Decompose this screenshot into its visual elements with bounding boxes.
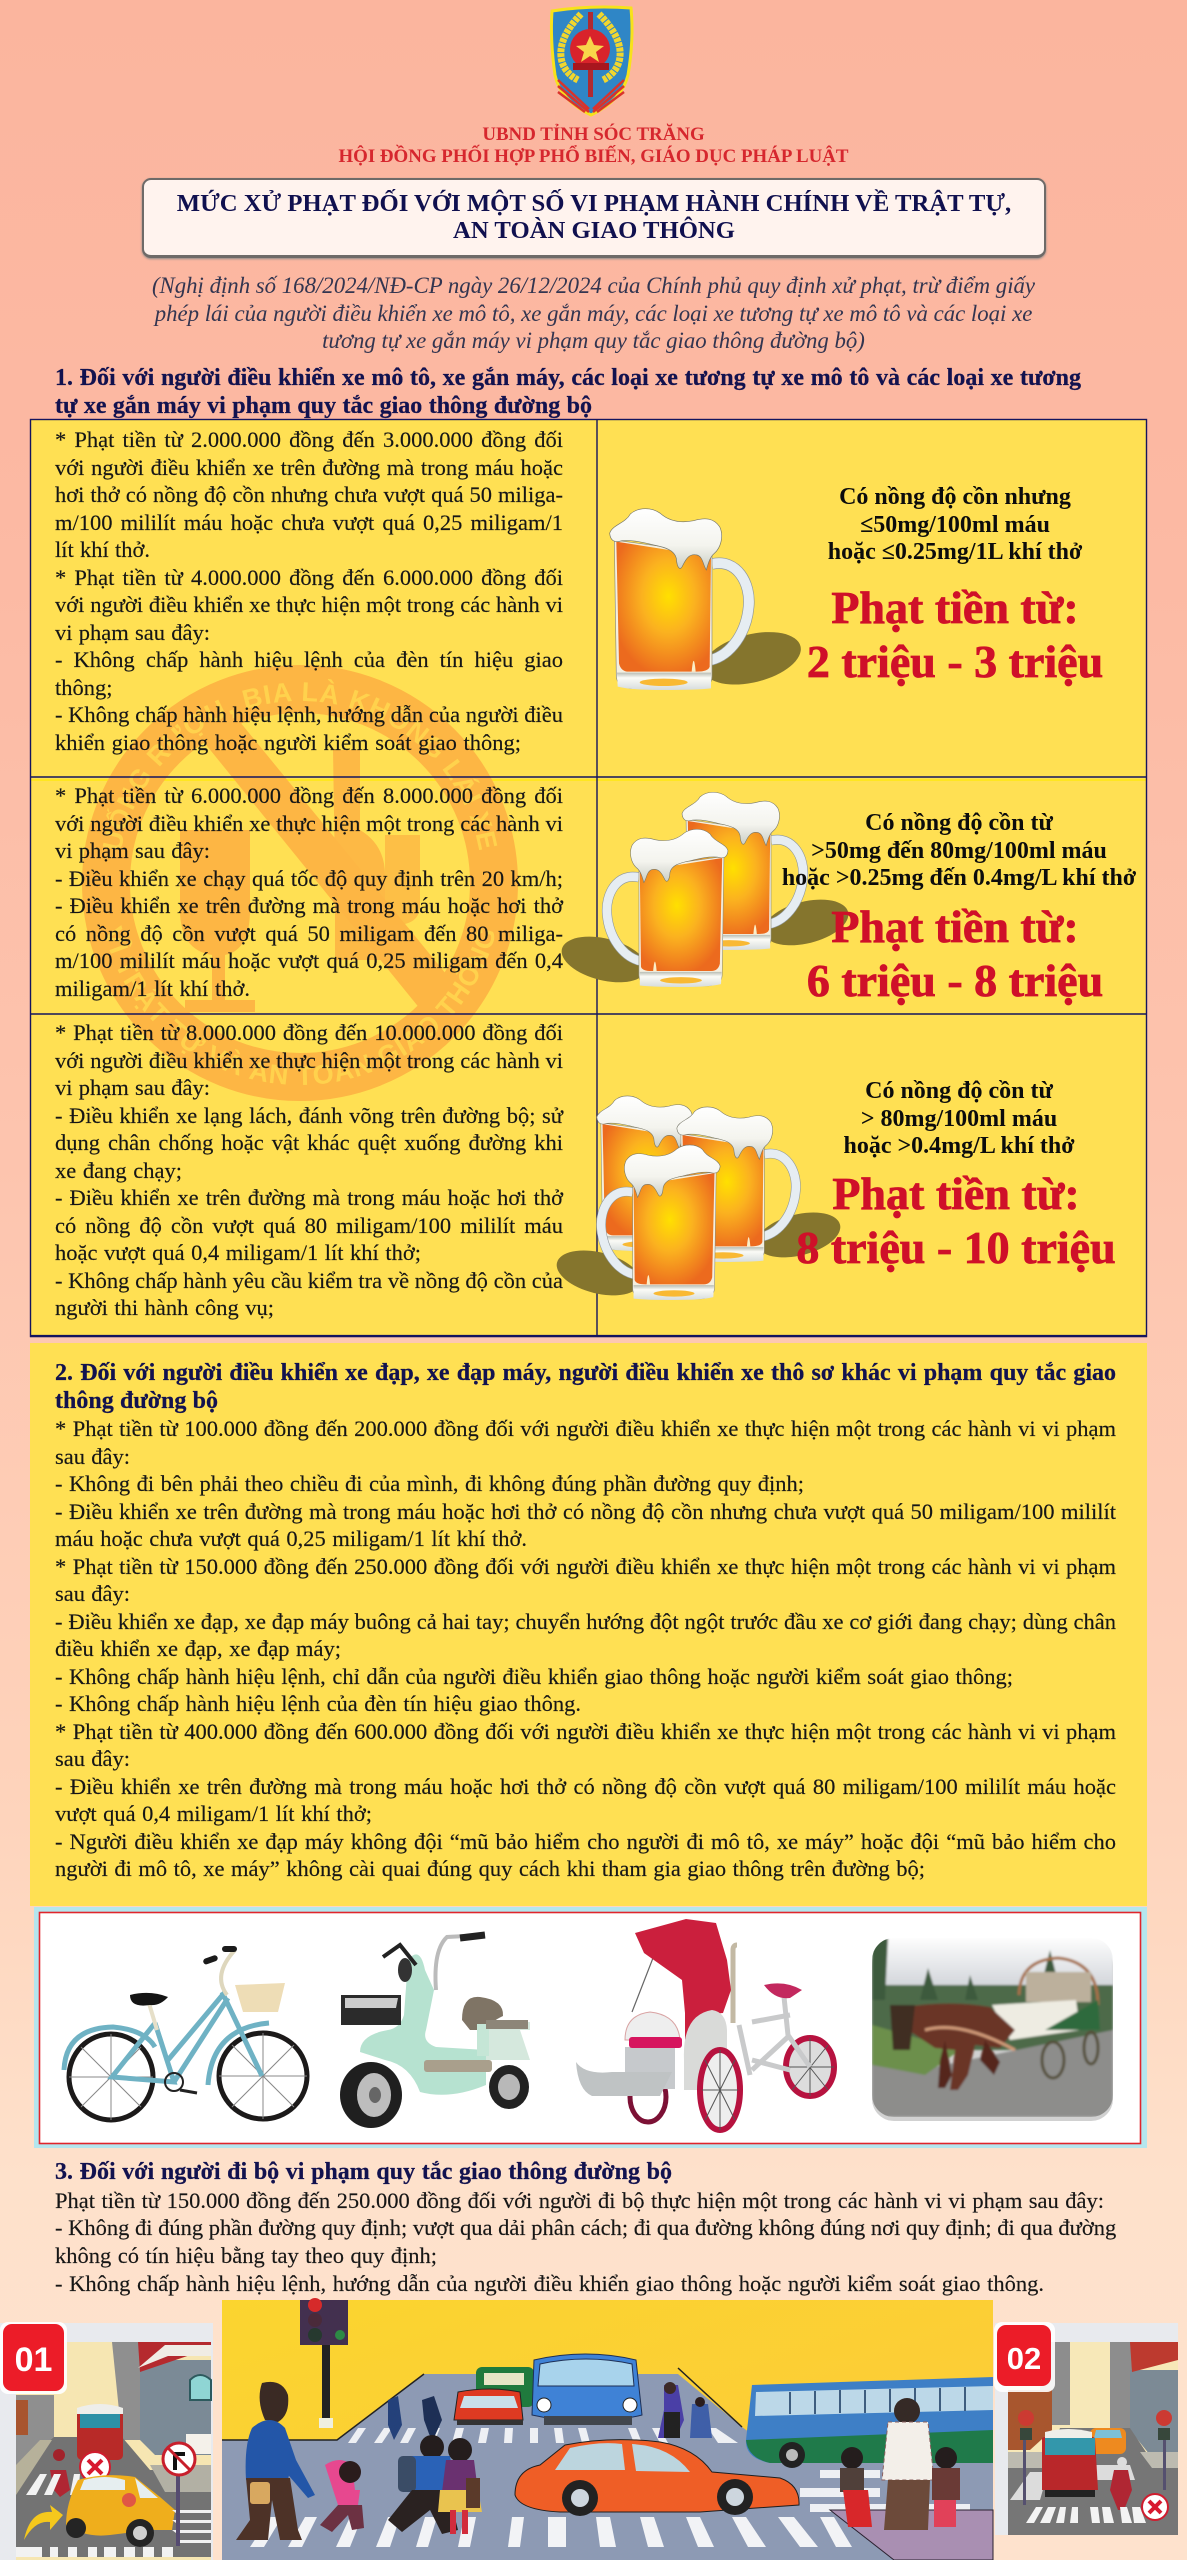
icon: bicycle [64,1946,307,2120]
woman and child [236,2382,364,2540]
badge 02: 02 [1007,2341,1041,2376]
badge 01 [3,2324,64,2391]
text: row 2 penalties: * Phạt tiền từ 6.000.000 đồng đến 8.000.000 đồng đối [55,783,563,808]
text: section 2 bicycles: sau đây: [55,1746,130,1771]
watermark: no drinking and driving emblem: UỐNG RƯỢU, BIA LÀ KHÔNG LÁI XE [102,679,498,850]
text: row 2 alcohol level [782,810,1136,891]
text: row 3 fine [796,1168,1116,1273]
text: row 3 alcohol level [843,1078,1074,1159]
text: row 2 penalties: với người điều khiển xe thực hiện một trong các hành vi [55,810,563,836]
text: row 2 penalties: vi phạm sau đây: [55,838,210,863]
text: row 3 penalties: * Phạt tiền từ 8.000.000 đồng đến 10.000.000 đồng đối [55,1020,563,1045]
text: row 2 fine [807,901,1103,1006]
text: row 3 fine: Phạt tiền từ: [832,1168,1080,1219]
icon: two beer mugs, row 2 [557,792,853,990]
heading: section 2 [55,1360,1116,1414]
motorcyclists [388,2396,442,2442]
man and two children [840,2398,960,2530]
heading: section 2: 2. Đối với người điều khiển xe đạp, xe đạp máy, người điều khiển xe thô sơ khác vi phạm quy tắc giao [55,1360,1116,1386]
title box: MỨC XỬ PHẠT ĐỐI VỚI MỘT SỐ VI PHẠM HÀNH CHÍNH VỀ TRẬT TỰ, [177,190,1011,217]
subtitle decree reference: tương tự xe gắn máy vi phạm quy tắc giao thông đường bộ) [322,328,865,353]
text: section 3 pedestrians [55,2159,1116,2296]
text: row 2 penalties: có nồng độ cồn vượt quá 50 miligam đến 80 miliga- [55,920,563,946]
organisation heading [338,124,849,167]
photo: horse carriage [872,1938,1113,2121]
text: row 3 penalties: xe đang chạy; [55,1158,182,1182]
text: row 2 alcohol level: hoặc >0.25mg đến 0.4mg/L khí thở [782,865,1136,891]
text: row 1 penalties: * Phạt tiền từ 2.000.000 đồng đến 3.000.000 đồng đối [55,427,563,452]
text: row 2 penalties: - Điều khiển xe trên đường mà trong máu hoặc hơi thở [55,893,563,918]
text: section 2 bicycles: - Không đi bên phải theo chiều đi của mình, đi không đúng phần đường quy định; [55,1471,804,1496]
text: row 1 penalties: thông; [55,674,113,700]
text: row 1 penalties: lít khí thở. [55,537,150,562]
illustration: violation example 02 [994,2322,1178,2535]
text: row 2 fine: 6 triệu - 8 triệu [807,955,1103,1006]
heading: section 1: 1. Đối với người điều khiển xe mô tô, xe gắn máy, các loại xe tương tự xe mô tô và các loại xe tương [55,365,1081,391]
text: section 2 bicycles: - Điều khiển xe trên đường mà trong máu hoặc hơi thở có nồng độ cồn vượt quá 80 miligam/100 mililít máu hoặc [55,1774,1116,1798]
organisation heading: UBND TỈNH SÓC TRĂNG [482,124,705,145]
heading: section 3: 3. Đối với người đi bộ vi phạm quy tắc giao thông đường bộ [55,2159,672,2185]
logo: legal council shield emblem [551,7,632,115]
text: section 2 bicycles [54,1360,1116,1881]
text: row 2 penalties [54,783,564,1001]
icon: three beer mugs, row 3 [552,1096,845,1303]
text: row 1 fine: Phạt tiền từ: [831,582,1079,633]
icon: cyclo [576,1919,834,2130]
small red car [454,2389,523,2425]
text: row 1 penalties: với người điều khiển xe thực hiện một trong các hành vi [55,592,563,617]
text: section 2 bicycles: người đi mô tô, xe máy” không cài quai đúng quy cách khi tham gia giao thông trên đường bộ; [55,1856,925,1881]
subtitle decree reference: (Nghị định số 168/2024/NĐ-CP ngày 26/12/2024 của Chính phủ quy định xử phạt, trừ điểm giấy [152,273,1035,298]
watermark: no drinking and driving emblem: VÌ TRẬT TỰ VÀ AN TOÀN GIAO THÔNG [106,925,494,1085]
text: row 3 penalties: dụng chân chống hoặc vật khác quệt xuống đường khi [55,1130,563,1155]
text: row 2 penalties: m/100 mililít máu hoặc vượt quá 0,25 miligam đến 0,4 [55,948,563,973]
text: row 1 alcohol level: Có nồng độ cồn nhưng [839,484,1071,510]
text: section 2 bicycles: - Người điều khiển xe đạp máy không đội “mũ bảo hiểm cho người đi mô tô, xe máy” hoặc đội “mũ bảo hiểm cho [55,1828,1116,1854]
badge 02 [997,2325,1051,2386]
panel: vehicles frame [34,1907,1147,2148]
title box: AN TOÀN GIAO THÔNG [453,217,735,244]
text: section 2 bicycles: - Điều khiển xe trên đường mà trong máu hoặc hơi thở có nồng độ cồn nhưng chưa vượt quá 50 miligam/100 mililít [55,1498,1116,1524]
text: section 2 bicycles: * Phạt tiền từ 100.000 đồng đến 200.000 đồng đối với người điều khiển xe thực hiện một trong các hành vi vi phạm [55,1416,1116,1441]
text: row 2 fine: Phạt tiền từ: [831,901,1079,952]
icon: electric scooter [340,1935,530,2128]
text: row 3 penalties: - Không chấp hành yêu cầu kiểm tra về nồng độ cồn của [55,1268,563,1292]
blue bus [746,2377,993,2468]
title box [142,178,1046,258]
orange car [515,2440,799,2516]
text: section 2 bicycles: - Không chấp hành hiệu lệnh, chỉ dẫn của người điều khiển giao thông hoặc người kiểm soát giao thông; [55,1664,1013,1688]
blue minibus [532,2354,642,2425]
text: row 1 penalties: m/100 mililít máu hoặc chưa vượt quá 0,25 miligam/1 [55,510,563,534]
text: row 3 penalties [54,1020,564,1320]
heading: section 1 [55,365,1081,419]
text: row 3 penalties: với người điều khiển xe thực hiện một trong các hành vi [55,1048,563,1072]
text: row 2 penalties: miligam/1 lít khí thở. [55,976,250,1000]
organisation heading: HỘI ĐỒNG PHỐI HỢP PHỔ BIẾN, GIÁO DỤC PHÁP LUẬT [338,146,849,167]
text: row 3 penalties: - Điều khiển xe trên đường mà trong máu hoặc hơi thở [55,1185,563,1210]
text: section 2 bicycles: sau đây: [55,1581,130,1606]
text: section 2 bicycles: - Điều khiển xe đạp, xe đạp máy buông cả hai tay; chuyển hướng đột ngột trước đầu xe cơ giới đang chạy; dùng chân [55,1608,1116,1634]
text: row 1 penalties: khiển giao thông hoặc người kiểm soát giao thông; [55,730,521,754]
text: row 1 penalties: * Phạt tiền từ 4.000.000 đồng đến 6.000.000 đồng đối [55,564,563,590]
text: row 3 alcohol level: > 80mg/100ml máu [861,1106,1057,1132]
text: section 2 bicycles: * Phạt tiền từ 400.000 đồng đến 600.000 đồng đối với người điều khiển xe thực hiện một trong các hành vi vi phạm [55,1718,1116,1744]
background pedestrians [658,2382,712,2438]
text: row 1 penalties: - Không chấp hành hiệu lệnh, hướng dẫn của người điều [55,702,563,727]
watermark: no drinking and driving emblem [82,665,518,1101]
school children [388,2435,482,2534]
text: row 1 fine: 2 triệu - 3 triệu [807,636,1103,687]
text: row 2 penalties: - Điều khiển xe chạy quá tốc độ quy định trên 20 km/h; [55,866,563,890]
text: row 1 alcohol level [828,484,1082,565]
text: row 1 penalties: vi phạm sau đây: [55,620,210,644]
text: section 3 pedestrians: - Không chấp hành hiệu lệnh, hướng dẫn của người điều khiển giao thông hoặc người kiểm soát giao thông. [55,2271,1044,2296]
text: row 1 alcohol level: hoặc ≤0.25mg/1L khí thở [828,539,1082,565]
text: row 2 alcohol level: >50mg đến 80mg/100ml máu [811,838,1107,864]
text: row 3 penalties: hoặc vượt quá 0,4 miligam/1 lít khí thở; [55,1240,421,1265]
text: section 2 bicycles: điều khiển xe đạp, xe đạp máy; [55,1636,341,1661]
panel: section 2 yellow background [30,1343,1147,1906]
text: section 3 pedestrians: Phạt tiền từ 150.000 đồng đến 250.000 đồng đối với người đi bộ thực hiện một trong các hành vi vi phạm sau đây: [55,2188,1104,2213]
text: section 2 bicycles: vượt quá 0,4 miligam/1 lít khí thở; [55,1801,372,1826]
text: row 3 penalties: vi phạm sau đây: [55,1075,210,1100]
illustration: violation example 01 [0,2322,213,2560]
text: row 1 fine [807,582,1103,687]
text: row 3 penalties: - Điều khiển xe lạng lách, đánh võng trên đường bộ; sử [55,1102,563,1128]
text: row 1 penalties: với người điều khiển xe trên đường mà trong máu hoặc [55,454,563,480]
text: row 3 penalties: có nồng độ cồn vượt quá 80 miligam/100 mililít máu [55,1212,563,1238]
text: row 1 penalties [54,427,563,755]
subtitle decree reference [152,273,1035,353]
green bus [476,2367,534,2407]
text: row 3 alcohol level: hoặc >0.4mg/L khí thở [843,1133,1074,1159]
text: row 3 penalties: người thi hành công vụ; [55,1295,274,1320]
table grid lines [30,419,1147,1336]
heading: section 1: tự xe gắn máy vi phạm quy tắc giao thông đường bộ [55,393,592,419]
illustration: street crossing scene [222,2298,993,2560]
text: section 3 pedestrians: không có tín hiệu bằng tay theo quy định; [55,2243,437,2268]
subtitle decree reference: phép lái của người điều khiển xe mô tô, xe gắn máy, các loại xe tương tự xe mô tô và các loại xe [155,300,1032,326]
text: row 1 alcohol level: ≤50mg/100ml máu [860,512,1050,538]
text: section 3 pedestrians: - Không đi đúng phần đường quy định; vượt qua dải phân cách; đi qua đường không đúng nơi quy định; đi qua đường [55,2215,1116,2240]
text: section 2 bicycles: máu hoặc chưa vượt quá 0,25 miligam/1 lít khí thở. [55,1526,527,1551]
badge 01: 01 [15,2341,52,2379]
text: row 3 alcohol level: Có nồng độ cồn từ [865,1078,1053,1104]
text: section 2 bicycles: - Không chấp hành hiệu lệnh của đèn tín hiệu giao thông. [55,1691,581,1716]
text: section 2 bicycles: * Phạt tiền từ 150.000 đồng đến 250.000 đồng đối với người điều khiển xe thực hiện một trong các hành vi vi phạm [55,1554,1116,1578]
panel: table yellow background [30,419,1147,1336]
text: row 1 penalties: hơi thở có nồng độ cồn nhưng chưa vượt quá 50 miliga- [55,482,563,507]
text: row 2 alcohol level: Có nồng độ cồn từ [865,810,1053,836]
text: row 1 penalties: - Không chấp hành hiệu lệnh của đèn tín hiệu giao [55,647,563,672]
text: row 3 fine: 8 triệu - 10 triệu [796,1222,1116,1273]
text: section 2 bicycles: sau đây: [55,1444,130,1468]
icon: one beer mug, row 1 [610,509,806,694]
heading: section 2: thông đường bộ [55,1388,218,1414]
